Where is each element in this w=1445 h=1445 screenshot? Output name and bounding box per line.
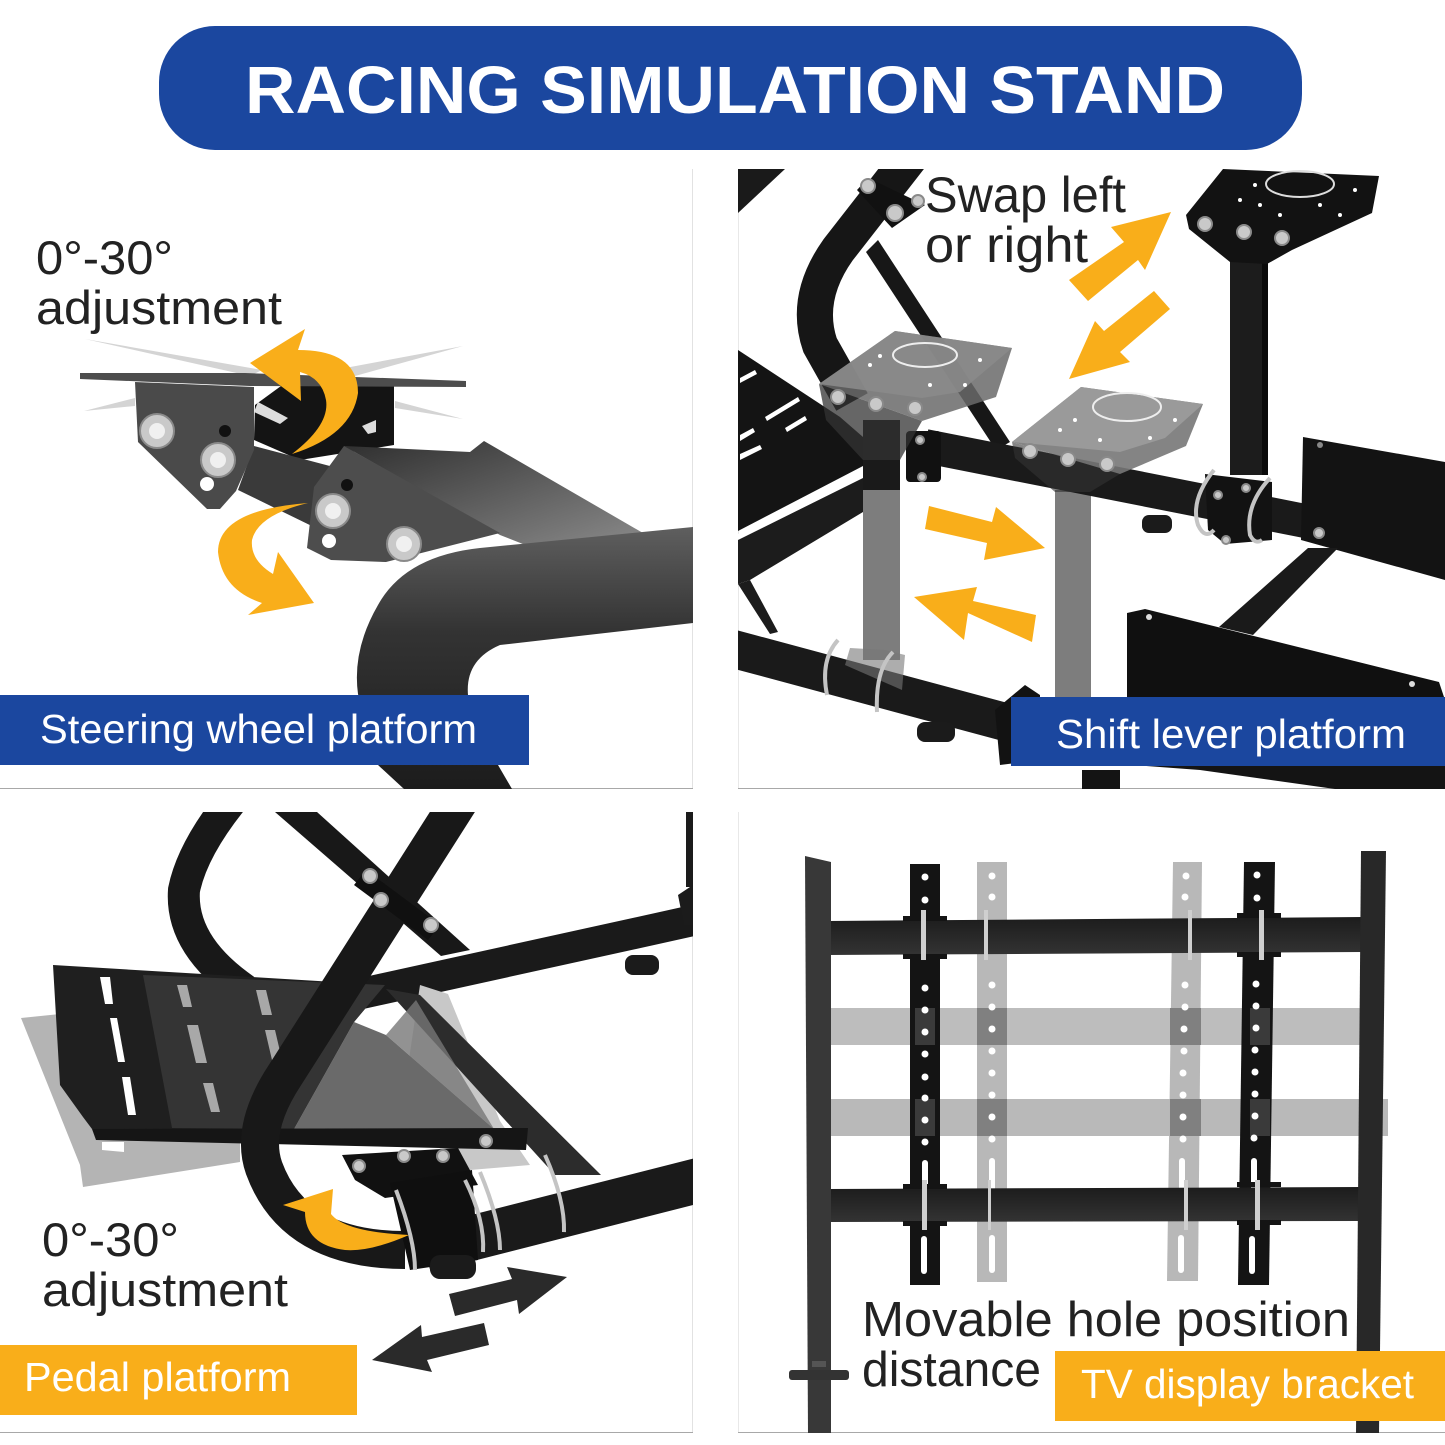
image: rear black bracket: [254, 386, 394, 460]
image: stem upper dark zone: [863, 420, 900, 495]
panel: steering wheel platform: [0, 169, 693, 790]
image: black rail right: [1238, 862, 1275, 1285]
image: tilted platform ghost plates: [84, 339, 463, 419]
arrow: down left: [1069, 291, 1170, 379]
image: pedal deck: [738, 350, 863, 634]
arrow: tilt: [283, 1189, 409, 1250]
image: left post: [805, 856, 831, 1434]
image: front foot: [917, 722, 955, 742]
image: pale ghost deck: [400, 985, 530, 1170]
image: front lower tube: [730, 648, 1020, 726]
arrow: lower rotation: [218, 503, 314, 615]
image: left side bracket: [135, 382, 254, 509]
annotation: adjustment angle: 0°-30°: [42, 1213, 179, 1266]
image: ghost plate right: [1012, 387, 1203, 492]
image: front tube clamp: [825, 640, 905, 712]
image: foot and rear clamp: [625, 812, 693, 975]
image: corner tube: [738, 169, 785, 213]
image: shifter plate in place: [1186, 169, 1379, 475]
image: upright tube: [815, 155, 912, 402]
image: rear side tube: [355, 919, 700, 995]
label: pedal platform: [0, 1345, 357, 1415]
image: silver bolts: [921, 910, 1264, 1230]
image: rear cross tube: [925, 446, 1305, 521]
image: lower ghost plate: [21, 1014, 240, 1187]
image: ghost right stem: [1055, 490, 1091, 700]
image: pedal plate: [53, 965, 528, 1152]
image: bolts: [140, 414, 421, 561]
arrow: right: [925, 506, 1045, 560]
arrow: slide forward: [449, 1267, 567, 1316]
annotation: adjustment angle: adjustment: [42, 1263, 288, 1316]
image: rear loop tube: [184, 800, 245, 990]
panel: pedal platform: [0, 800, 700, 1434]
image: left tube clamp: [906, 431, 941, 482]
annotation: swap left or right: Swap left: [925, 167, 1126, 223]
label: steering wheel platform: Steering wheel platform: [40, 706, 477, 752]
arrow: slide back: [372, 1323, 489, 1372]
image: diagonal strut lower: [386, 989, 601, 1175]
image: diagonal strut: [866, 240, 1010, 450]
image: under-label rails: [1082, 764, 1445, 789]
image: ghost cross bars: [831, 1008, 1388, 1136]
image: cross strut: [1219, 548, 1338, 635]
image: ghost left stem: [863, 490, 900, 660]
panel: shift lever platform: [730, 155, 1445, 790]
image: handlebar tube: [357, 527, 693, 789]
image: lower side tube: [425, 1180, 700, 1250]
label: pedal platform: Pedal platform: [24, 1354, 291, 1400]
image: diagonal strut upper: [275, 812, 470, 956]
image: right box beam: [1301, 437, 1445, 580]
image: right tube clamp: [1196, 470, 1272, 544]
label: TV display bracket: [1055, 1351, 1445, 1421]
image: ghost plate left: [819, 331, 1012, 460]
annotation: movable hole position: Movable hole position: [862, 1293, 1350, 1347]
annotation: movable hole position: [856, 1293, 1353, 1402]
image: ghost rail left: [977, 862, 1007, 1282]
image: mounting washers: [903, 913, 1281, 1226]
title banner: RACING SIMULATION STAND: [245, 53, 1225, 128]
annotation: adjustment angle: adjustment: [36, 281, 282, 334]
annotation: swap left or right: or right: [925, 217, 1088, 273]
image: upright clamp: [857, 178, 925, 228]
arrow: left: [914, 587, 1036, 642]
annotation: movable hole position: distance: [862, 1343, 1041, 1397]
image: steering plate: [80, 373, 466, 387]
annotation: swap left or right: [925, 167, 1126, 273]
image: main bent tube: [260, 800, 460, 1250]
image: top cross bar: [828, 917, 1363, 955]
image: right side bracket: [307, 446, 500, 562]
image: ghost rail right: [1167, 862, 1202, 1281]
image: tube clamp and u-bolts: [390, 1155, 564, 1270]
image: pedal foot: [430, 1255, 476, 1279]
image: arm: [238, 446, 330, 525]
image: front box beam: [1127, 609, 1444, 697]
image: right post: [1356, 851, 1386, 1434]
panel: TV display bracket: [738, 812, 1445, 1434]
image: foot: [1142, 515, 1172, 533]
annotation: adjustment angle: 0°-30°: [36, 231, 173, 284]
image: clamp on left post: [789, 1361, 849, 1380]
label: shift lever platform: [1011, 697, 1445, 766]
label: shift lever platform: Shift lever platform: [1056, 711, 1406, 757]
image: seat bracket with bolts: [342, 1135, 492, 1198]
label: steering wheel platform: [0, 695, 529, 765]
image: upper clamp with bolts: [354, 869, 440, 940]
image: front right clamp: [995, 685, 1040, 765]
title banner: [159, 26, 1302, 150]
label: TV display bracket: TV display bracket: [1081, 1361, 1415, 1407]
annotation: adjustment angle: [38, 241, 282, 334]
arrow: upper rotation: [250, 329, 358, 454]
arrow: up right: [1069, 212, 1171, 301]
image: top mounting plate: [344, 441, 643, 546]
image: bottom cross bar: [828, 1187, 1361, 1222]
image: black rail left: [910, 864, 940, 1285]
annotation: adjustment angle: [42, 1213, 288, 1316]
